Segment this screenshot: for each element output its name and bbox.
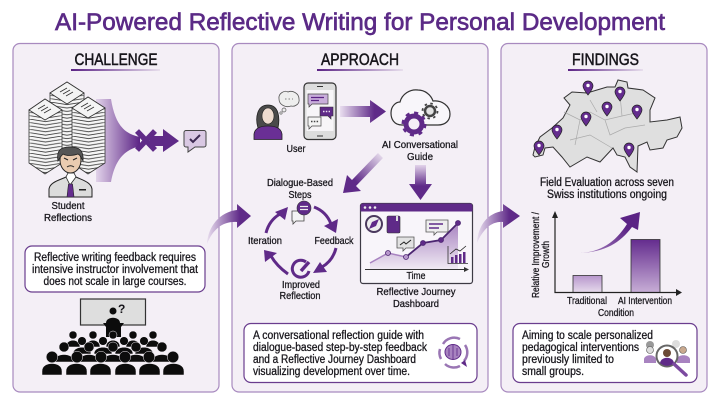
panel: findings [501,44,707,392]
icon: magnified learners [644,340,690,375]
label: reflective journey dashboard [376,286,456,310]
arrow: guide to dashboard [409,165,432,200]
arrow: growth curve [580,212,640,253]
callout: approach text: visualizing development over time. [253,366,410,378]
icon: phone with chat [304,83,336,140]
label: student reflections [44,200,92,224]
heading: findings: FINDINGS [572,51,639,69]
label: iteration: Iteration [248,235,282,247]
x axis labels: Traditional [567,295,607,307]
callout: challenge text [25,246,205,292]
arrow: guide to dialogue steps [343,153,383,193]
bar: ai intervention [631,240,660,292]
x axis labels: AI Intervention [618,295,672,307]
x axis labels: Condition [598,307,634,319]
callout: findings text: small groups. [522,366,584,378]
icon: funnel bottleneck [96,99,140,182]
chart axes [552,211,682,296]
callout: challenge text: intensive instructor involvement that [32,264,199,276]
icon: stressed instructor [49,147,92,197]
icon: brain cycle [439,338,467,368]
label: reflective journey dashboard: Dashboard [393,298,439,310]
y axis label: Growth [541,241,552,268]
panel: challenge [13,44,219,392]
icon: location pins [534,81,642,157]
map: switzerland [533,80,682,172]
x axis labels [567,295,672,319]
label: ai conversational guide: AI Conversational [382,139,458,151]
label: student reflections: Reflections [44,212,92,224]
icon: user [254,91,299,140]
label: field evaluation [540,177,674,201]
chart: reflective journey dashboard: Time [406,270,426,282]
icon: dialogue bubbles [292,201,311,224]
label: improved reflection [280,279,321,302]
label: improved reflection: Improved [282,279,320,291]
arrow: challenge to approach [207,204,251,244]
heading: approach: APPROACH [321,51,399,69]
label: ai conversational guide [382,139,458,163]
label: dialogue-based steps: Steps [288,189,312,201]
callout: findings text [513,324,697,382]
label: ai conversational guide: Guide [407,151,433,163]
callout: approach text [244,324,477,382]
callout: challenge text: Reflective writing feedback requires [34,252,196,264]
arrow: approach to findings [477,204,520,243]
label: user: User [286,143,306,155]
callout: findings text: Aiming to scale personalized [522,330,653,342]
icon: paper stacks [29,82,105,174]
chart: improvement by condition [531,211,682,319]
callout: findings text: previously limited to [522,354,614,366]
icon: checked chat bubble [184,130,206,152]
arrow: phone to guide [340,100,386,123]
label: dialogue-based steps: Dialogue-Based [267,177,333,189]
icon: blocked arrow [137,129,179,152]
title: AI-Powered Reflective Writing for Personal Development [55,9,665,36]
callout: approach text: A conversational reflection guide with [253,330,424,342]
label: reflective journey dashboard: Reflective Journey [376,286,456,298]
diagram: feedback cycle arrows [264,207,338,274]
icon: lecture hall: ? [118,302,125,316]
heading: challenge: CHALLENGE [74,51,158,69]
label: dialogue-based steps [267,177,333,201]
label: student reflections: Student [52,200,85,212]
y axis label [531,212,552,298]
callout: challenge text: does not scale in large courses. [44,276,186,288]
callout: approach text: dialogue-based step-by-step feedback [253,342,427,354]
label: feedback: Feedback [314,235,354,247]
callout: findings text: pedagogical interventions [522,342,639,354]
icon: lecture hall [42,299,184,375]
label: improved reflection: Reflection [280,290,321,302]
bar: traditional [573,276,602,292]
chart: reflective journey dashboard [360,204,472,284]
callout: approach text: and a Reflective Journey Dashboard [253,354,416,366]
label: field evaluation: Field Evaluation across seven [540,177,674,189]
panel: approach [232,44,488,392]
label: field evaluation: Swiss institutions ongoing [547,189,667,201]
icon: cloud with gears [391,90,450,135]
icon: improved reflection [292,260,309,277]
y axis label: Relative Improvement / [531,212,542,298]
